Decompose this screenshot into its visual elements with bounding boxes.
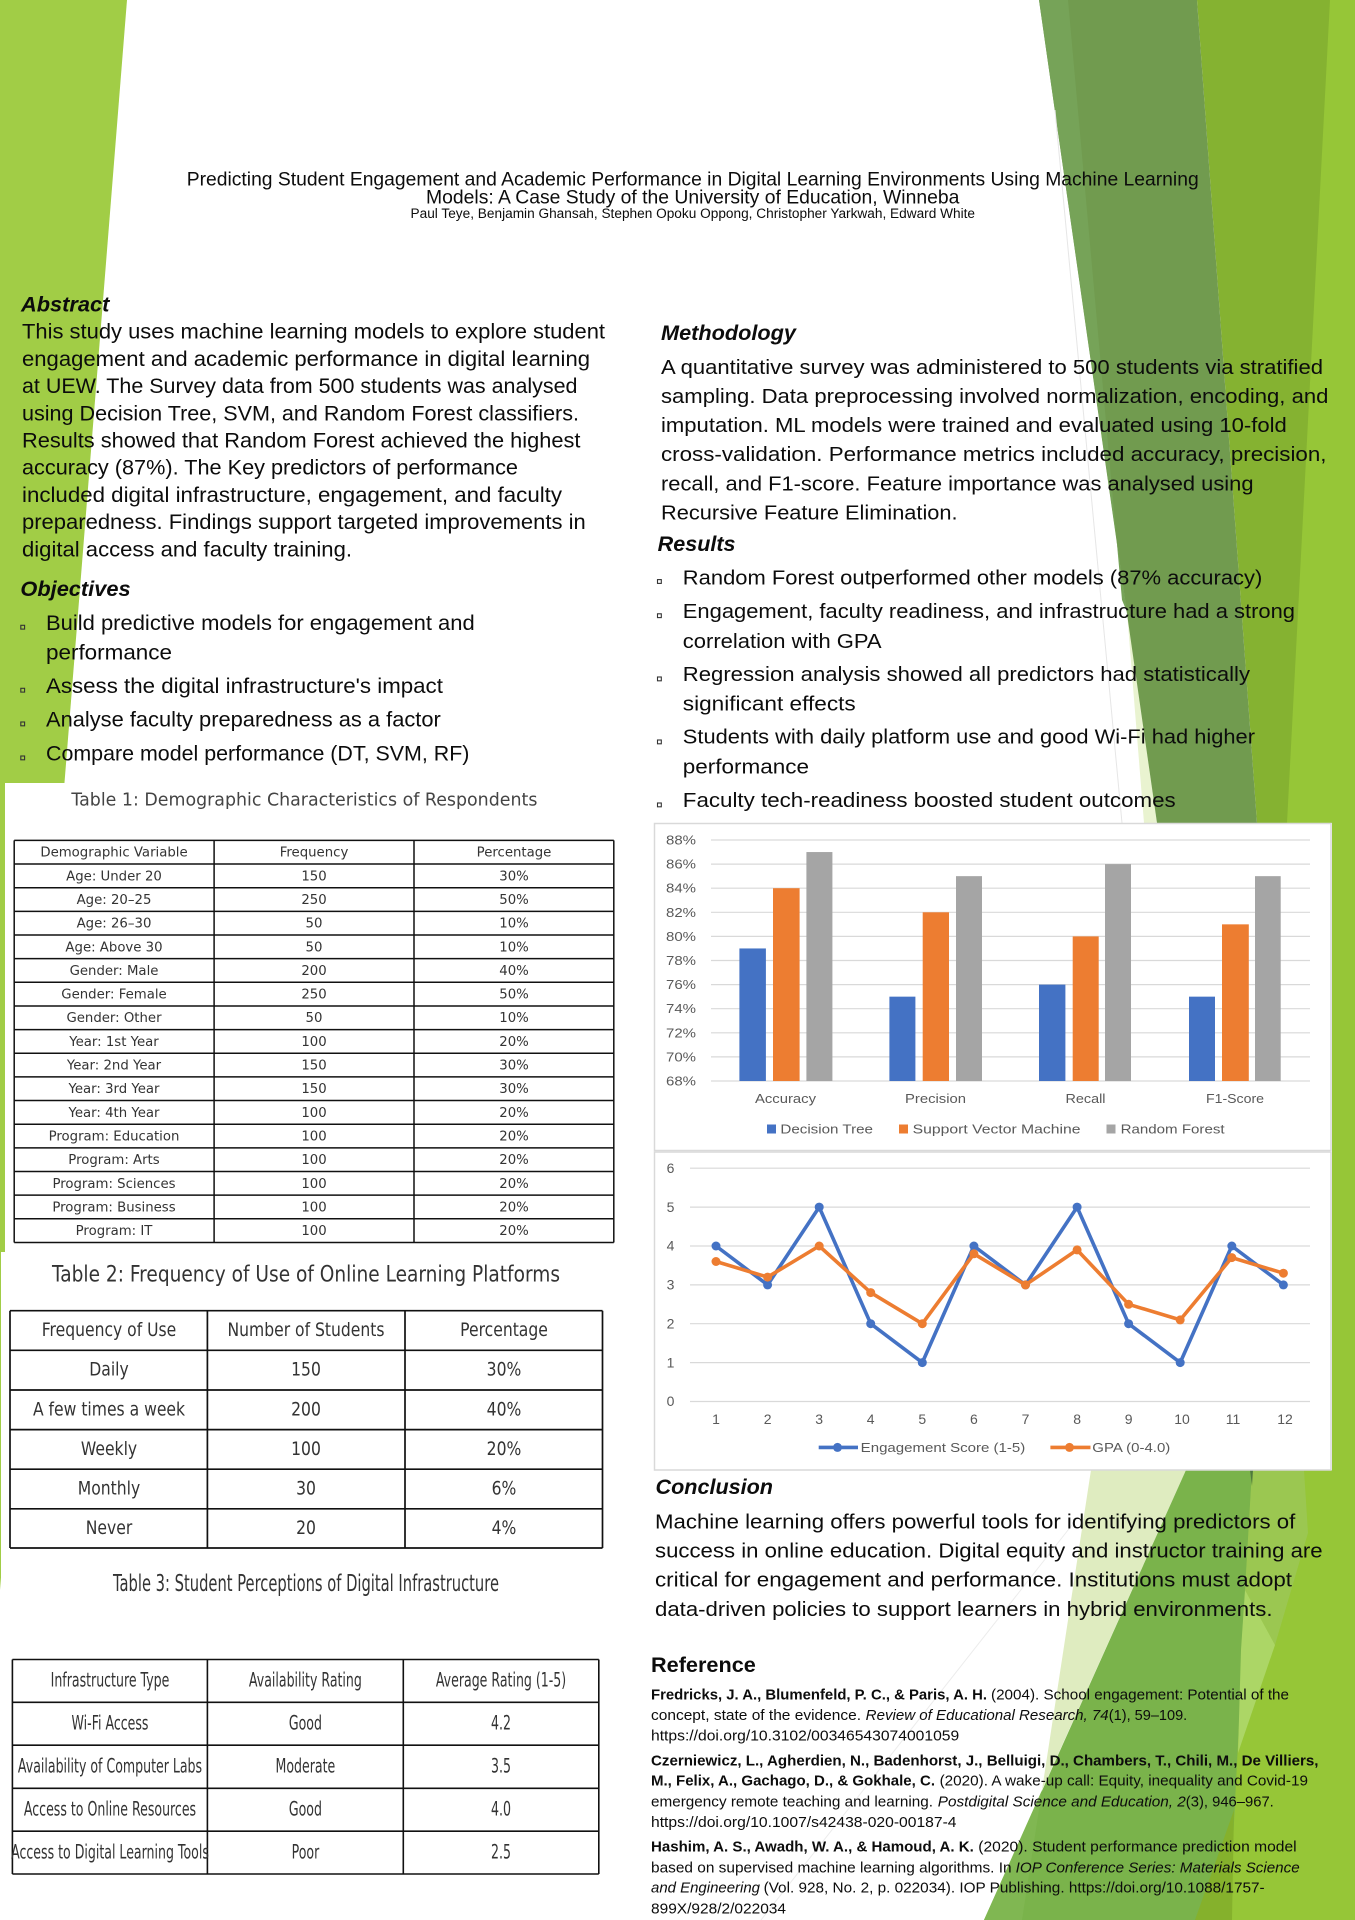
- conclusion body: critical for engagement and performance. Institutions must adopt: [655, 1569, 1292, 1592]
- table 2: frequency of use: Weekly: [81, 1439, 137, 1460]
- abstract body: [22, 321, 605, 561]
- reference: Hashim: 899X/928/2/022034: [651, 1901, 786, 1917]
- results heading: Results: [658, 533, 736, 556]
- reference: Czerniewicz: M., Felix, A., Gachago, D., & Gokhale, C.: [651, 1774, 935, 1790]
- left green background wedge: [0, 0, 127, 1592]
- table 1: demographic characteristics: 50: [306, 915, 322, 932]
- table 2: frequency of use: 20: [296, 1518, 316, 1540]
- y axis labels: 3: [667, 1277, 675, 1293]
- table 1: demographic characteristics: 20%: [499, 1176, 529, 1192]
- reference: Hashim: Hashim, A. S., Awadh, W. A., & Hamoud, A. K.: [651, 1840, 974, 1856]
- objectives list: Build predictive models for engagement and: [46, 612, 475, 635]
- reference: Hashim: based on supervised machine learning algorithms. In: [651, 1860, 1012, 1876]
- authors: Paul Teye, Benjamin Ghansah, Stephen Opoku Oppong, Christopher Yarkwah, Edward White: [410, 206, 975, 221]
- objectives list: Analyse faculty preparedness as a factor: [46, 709, 441, 732]
- table 1: demographic characteristics: Percentage: [477, 844, 551, 860]
- table 1: demographic characteristics: Program: Sciences: [52, 1176, 176, 1192]
- table 3: digital infrastructure: Availability of Computer Labs: [18, 1755, 202, 1777]
- results list: performance: [683, 756, 809, 778]
- table 1: demographic characteristics: 100: [301, 1128, 327, 1145]
- table 1: demographic characteristics: 30%: [499, 868, 529, 884]
- results list: [658, 566, 1295, 812]
- category labels: Recall: [1066, 1091, 1106, 1106]
- x axis labels: [712, 1411, 1293, 1427]
- x axis labels: 6: [970, 1411, 978, 1427]
- table 1: demographic characteristics: 10%: [499, 1010, 529, 1026]
- y axis labels: 6: [667, 1160, 675, 1176]
- table 3: digital infrastructure: Infrastructure Type: [51, 1669, 169, 1691]
- table 1: demographic characteristics: 250: [301, 986, 327, 1003]
- table 2: frequency of use: 6%: [492, 1478, 516, 1500]
- table 1: demographic characteristics: Demographic Variable: [40, 844, 188, 860]
- y axis labels: 4: [667, 1238, 675, 1254]
- reference: Fredricks: (2004). School engagement: Potential of the: [991, 1687, 1289, 1703]
- objectives list: Compare model performance (DT, SVM, RF): [46, 743, 469, 766]
- y axis labels: 2: [667, 1315, 675, 1331]
- x axis labels: 3: [815, 1411, 823, 1427]
- table 1: demographic characteristics: Frequency: [280, 844, 348, 860]
- conclusion body: success in online education. Digital equity and instructor training are: [655, 1539, 1323, 1562]
- reference: Hashim: (Vol. 928, No. 2, p. 022034). IOP Publishing. https://doi.org/10.1088/1757-: [764, 1881, 1265, 1897]
- bars: random forest: [806, 852, 1281, 1081]
- reference: Fredricks: https://doi.org/10.3102/00346543074001059: [651, 1728, 959, 1744]
- table 1: demographic characteristics: 150: [301, 1057, 327, 1074]
- x axis labels: 2: [764, 1411, 772, 1427]
- table 1: demographic characteristics: 100: [301, 1105, 327, 1121]
- table 1: demographic characteristics: Year: 4th Year: [68, 1105, 160, 1121]
- objectives list: [21, 612, 475, 766]
- table 1: demographic characteristics: [14, 840, 614, 1242]
- reference: Czerniewicz: emergency remote teaching and learning.: [651, 1794, 933, 1810]
- table 1: demographic characteristics: 30%: [499, 1081, 529, 1097]
- results list: Faculty tech-readiness boosted student outcomes: [683, 789, 1176, 812]
- abstract body: using Decision Tree, SVM, and Random Forest classifiers.: [22, 402, 579, 425]
- panel: methodology: [661, 322, 1328, 524]
- reference: Czerniewicz: Postdigital Science and Education, 2: [938, 1794, 1187, 1810]
- table 1: demographic characteristics: Age: Above 30: [65, 939, 163, 955]
- objectives heading: Objectives: [20, 578, 131, 601]
- table 3: digital infrastructure: Access to Online Resources: [24, 1798, 196, 1820]
- table 1: demographic characteristics: 50: [306, 939, 322, 955]
- reference: Hashim: IOP Conference Series: Materials Science: [1016, 1860, 1300, 1876]
- conclusion heading: Conclusion: [656, 1476, 773, 1499]
- table 1: demographic characteristics: 50: [306, 1010, 322, 1026]
- abstract body: preparedness. Findings support targeted improvements in: [22, 511, 586, 534]
- y axis labels: 78%: [666, 953, 696, 968]
- table 3: digital infrastructure: [11, 1660, 599, 1874]
- category labels: Precision: [905, 1091, 966, 1106]
- x axis labels: 1: [712, 1411, 720, 1427]
- objectives list: performance: [46, 641, 172, 664]
- y axis labels: 5: [667, 1199, 675, 1215]
- table 1: demographic characteristics: 100: [301, 1034, 327, 1050]
- table 1: demographic characteristics: Program: IT: [76, 1223, 153, 1239]
- table 1: demographic characteristics: 150: [301, 868, 327, 884]
- table 1: demographic characteristics: 100: [301, 1152, 327, 1168]
- x axis labels: 7: [1022, 1411, 1030, 1427]
- methodology heading: Methodology: [661, 322, 797, 345]
- bars: support vector machine: [773, 888, 1249, 1081]
- table 1: demographic characteristics: 20%: [499, 1152, 529, 1168]
- panel: conclusion: [655, 1476, 1323, 1621]
- table 3: digital infrastructure: 2.5: [491, 1841, 511, 1863]
- table 2: frequency of use: 4%: [492, 1518, 516, 1540]
- reference: Fredricks: [651, 1687, 1289, 1744]
- bars: decision tree: [739, 948, 1215, 1081]
- y axis labels: 70%: [666, 1049, 696, 1064]
- table 3: digital infrastructure: 4.0: [491, 1798, 511, 1820]
- table 3: digital infrastructure: Good: [289, 1798, 322, 1820]
- results list: Random Forest outperformed other models (87% accuracy): [683, 566, 1262, 590]
- title block: Predicting Student Engagement and Academic Performance in Digital Learning Environments Using Machine Learning: [187, 168, 1199, 190]
- panel: results: [658, 533, 1295, 812]
- table 1: demographic characteristics: 100: [301, 1223, 327, 1239]
- table 1: demographic characteristics: 10%: [499, 915, 529, 932]
- reference: Fredricks: (1), 59–109.: [1109, 1708, 1187, 1724]
- table 2: frequency of use: 150: [291, 1359, 321, 1381]
- table 3: digital infrastructure: 4.2: [491, 1712, 511, 1734]
- reference: Hashim: and Engineering: [651, 1881, 761, 1897]
- table 1: demographic characteristics: 10%: [499, 939, 529, 955]
- table 1: demographic characteristics: 20%: [499, 1105, 529, 1121]
- conclusion body: data-driven policies to support learners in hybrid environments.: [655, 1598, 1272, 1621]
- table 1: demographic characteristics: 200: [301, 963, 327, 979]
- panel: abstract: [20, 293, 605, 561]
- y axis labels: 88%: [666, 832, 696, 848]
- methodology body: imputation. ML models were trained and evaluated using 10-fold: [661, 414, 1287, 437]
- category labels: F1-Score: [1206, 1091, 1264, 1106]
- methodology body: [661, 356, 1328, 524]
- series: GPA: [712, 1242, 1288, 1328]
- abstract body: Results showed that Random Forest achieved the highest: [22, 430, 581, 452]
- abstract body: This study uses machine learning models to explore student: [22, 321, 605, 344]
- table 3: digital infrastructure: 3.5: [491, 1755, 511, 1777]
- table 2: frequency of use: 40%: [487, 1399, 521, 1421]
- reference: Czerniewicz: (3), 946–967.: [1186, 1794, 1274, 1810]
- x axis labels: 10: [1174, 1411, 1190, 1427]
- bar chart legend: Random Forest: [1121, 1122, 1225, 1136]
- y axis labels: 76%: [666, 977, 696, 992]
- results list: Students with daily platform use and good Wi-Fi had higher: [683, 726, 1255, 748]
- table 2: frequency of use: Never: [86, 1518, 133, 1540]
- y axis labels: [667, 1160, 675, 1409]
- bar chart legend: [767, 1122, 1225, 1136]
- bar chart legend: Support Vector Machine: [913, 1122, 1080, 1136]
- table 2: frequency of use: 20%: [487, 1439, 521, 1460]
- x axis labels: 5: [918, 1411, 926, 1427]
- x axis labels: 4: [867, 1411, 875, 1427]
- table 1: demographic characteristics: Program: Business: [52, 1199, 176, 1216]
- table 1: demographic characteristics: Gender: Other: [66, 1010, 162, 1026]
- reference: Hashim: [651, 1840, 1300, 1917]
- objectives list: Assess the digital infrastructure's impact: [46, 675, 443, 698]
- abstract body: accuracy (87%). The Key predictors of performance: [22, 457, 518, 480]
- x axis labels: 12: [1277, 1411, 1293, 1427]
- table 2: frequency of use: Frequency of Use: [42, 1320, 176, 1341]
- conclusion body: Machine learning offers powerful tools for identifying predictors of: [655, 1510, 1296, 1533]
- category labels: Accuracy: [755, 1091, 817, 1106]
- reference heading: Reference: [651, 1654, 756, 1677]
- table 1: demographic characteristics: 50%: [499, 986, 529, 1003]
- results list: Engagement, faculty readiness, and infrastructure had a strong: [683, 600, 1295, 623]
- abstract body: included digital infrastructure, engagement, and faculty: [22, 484, 563, 507]
- table 1: demographic characteristics: Program: Arts: [68, 1152, 160, 1168]
- table 1: demographic characteristics: Age: 26–30: [77, 915, 151, 932]
- reference: Fredricks: concept, state of the evidence.: [651, 1708, 861, 1724]
- table 2: frequency of use: [10, 1311, 602, 1548]
- line chart legend: GPA (0-4.0): [1092, 1440, 1170, 1455]
- table 1: demographic characteristics: 100: [301, 1199, 327, 1216]
- methodology body: cross-validation. Performance metrics included accuracy, precision,: [661, 443, 1326, 466]
- table 3: digital infrastructure: Good: [289, 1712, 322, 1734]
- x axis labels: 8: [1073, 1411, 1081, 1427]
- table 1: demographic characteristics: Gender: Male: [70, 963, 158, 979]
- category labels: [755, 1091, 1264, 1106]
- abstract heading: Abstract: [20, 293, 110, 316]
- table 1: demographic characteristics: 20%: [499, 1199, 529, 1216]
- y axis labels: 80%: [666, 929, 696, 944]
- table 3: digital infrastructure: Poor: [292, 1841, 319, 1863]
- table 1: demographic characteristics: 50%: [499, 892, 529, 908]
- table 1: demographic characteristics: 150: [301, 1081, 327, 1097]
- table 3: digital infrastructure: Availability Rating: [249, 1669, 362, 1691]
- y axis labels: 82%: [666, 905, 696, 920]
- reference: Czerniewicz: (2020). A wake-up call: Equity, inequality and Covid-19: [940, 1774, 1308, 1790]
- table 1: demographic characteristics: 250: [301, 892, 327, 908]
- series: engagement score: [712, 1203, 1288, 1367]
- table 3: digital infrastructure: Moderate: [276, 1755, 335, 1777]
- conclusion body: [655, 1510, 1323, 1621]
- table 3 heading: Table 3: Student Perceptions of Digital Infrastructure: [112, 1571, 499, 1597]
- y axis labels: 1: [667, 1354, 675, 1370]
- table 1: demographic characteristics: Program: Education: [49, 1128, 179, 1145]
- results list: Regression analysis showed all predictors had statistically: [683, 663, 1251, 686]
- bar chart: model performance: [654, 824, 1331, 1150]
- table 2: frequency of use: 30%: [487, 1359, 521, 1381]
- reference: Czerniewicz: [651, 1753, 1318, 1831]
- table 1: demographic characteristics: Gender: Female: [61, 986, 167, 1003]
- table 2 heading: Table 2: Frequency of Use of Online Learning Platforms: [51, 1263, 560, 1288]
- abstract body: engagement and academic performance in digital learning: [22, 348, 590, 371]
- panel: references: [651, 1654, 1318, 1917]
- methodology body: sampling. Data preprocessing involved normalization, encoding, and: [661, 385, 1328, 408]
- title block: [187, 168, 1199, 221]
- line chart legend: [819, 1440, 1170, 1455]
- methodology body: Recursive Feature Elimination.: [661, 502, 958, 524]
- table 1: demographic characteristics: 20%: [499, 1034, 529, 1050]
- y axis labels: 72%: [666, 1025, 696, 1040]
- table 1: demographic characteristics: 20%: [499, 1223, 529, 1239]
- results list: significant effects: [683, 693, 856, 716]
- y axis labels: 0: [667, 1393, 675, 1409]
- table 1: demographic characteristics: 40%: [499, 963, 529, 979]
- panel: objectives: [20, 578, 475, 766]
- table 1: demographic characteristics: 100: [301, 1176, 327, 1192]
- table 2: frequency of use: 200: [291, 1399, 321, 1421]
- y axis labels: 68%: [666, 1074, 696, 1088]
- methodology body: A quantitative survey was administered to 500 students via stratified: [661, 356, 1323, 379]
- reference: Czerniewicz: https://doi.org/10.1007/s42438-020-00187-4: [651, 1815, 956, 1831]
- title block: Models: A Case Study of the University of Education, Winneba: [426, 186, 960, 208]
- reference: Fredricks: Fredricks, J. A., Blumenfeld, P. C., & Paris, A. H.: [651, 1687, 987, 1703]
- methodology body: recall, and F1-score. Feature importance was analysed using: [661, 472, 1254, 495]
- reference: Czerniewicz: Czerniewicz, L., Agherdien, N., Badenhorst, J., Belluigi, D., Chambers, T., Chili, M., De Villiers,: [651, 1753, 1318, 1769]
- table 1: demographic characteristics: Year: 2nd Year: [66, 1057, 162, 1074]
- line chart legend: Engagement Score (1-5): [861, 1440, 1025, 1455]
- y axis labels: 84%: [666, 881, 696, 896]
- table 2: frequency of use: Percentage: [460, 1320, 548, 1341]
- bar chart legend: Decision Tree: [780, 1122, 873, 1136]
- table 3: digital infrastructure: Wi-Fi Access: [72, 1712, 148, 1734]
- y axis labels: 74%: [666, 1001, 696, 1016]
- table 2: frequency of use: A few times a week: [33, 1399, 185, 1421]
- y axis labels: [666, 832, 696, 1088]
- table 3: digital infrastructure: Average Rating (1-5): [436, 1669, 566, 1691]
- x axis labels: 11: [1226, 1411, 1240, 1427]
- x axis labels: 9: [1125, 1411, 1133, 1427]
- table 2: frequency of use: Daily: [89, 1359, 129, 1381]
- table 2: frequency of use: Monthly: [78, 1478, 140, 1500]
- abstract body: digital access and faculty training.: [22, 538, 352, 561]
- table 1: demographic characteristics: Year: 3rd Year: [68, 1081, 160, 1097]
- table 2: frequency of use: 30: [296, 1478, 316, 1500]
- line chart: engagement score vs GPA: [654, 1152, 1331, 1470]
- abstract body: at UEW. The Survey data from 500 students was analysed: [22, 375, 578, 398]
- table 1 heading: Table 1: Demographic Characteristics of Respondents: [70, 791, 537, 811]
- table 1: demographic characteristics: Year: 1st Year: [68, 1034, 159, 1050]
- right green background bands: [761, 0, 1355, 1920]
- reference: Hashim: (2020). Student performance prediction model: [978, 1840, 1297, 1856]
- table 2: frequency of use: Number of Students: [228, 1320, 385, 1341]
- table 3: digital infrastructure: Access to Digital Learning Tools: [11, 1841, 209, 1863]
- table 1: demographic characteristics: 20%: [499, 1128, 529, 1145]
- table 1: demographic characteristics: Age: 20–25: [77, 892, 151, 908]
- table 2: frequency of use: 100: [291, 1439, 321, 1460]
- table 1: demographic characteristics: Age: Under 20: [66, 868, 162, 884]
- results list: correlation with GPA: [683, 630, 882, 653]
- y axis labels: 86%: [666, 857, 696, 872]
- reference: Fredricks: Review of Educational Research, 74: [866, 1708, 1109, 1724]
- chart backing panel: [654, 823, 1332, 1470]
- table 1: demographic characteristics: 30%: [499, 1057, 529, 1074]
